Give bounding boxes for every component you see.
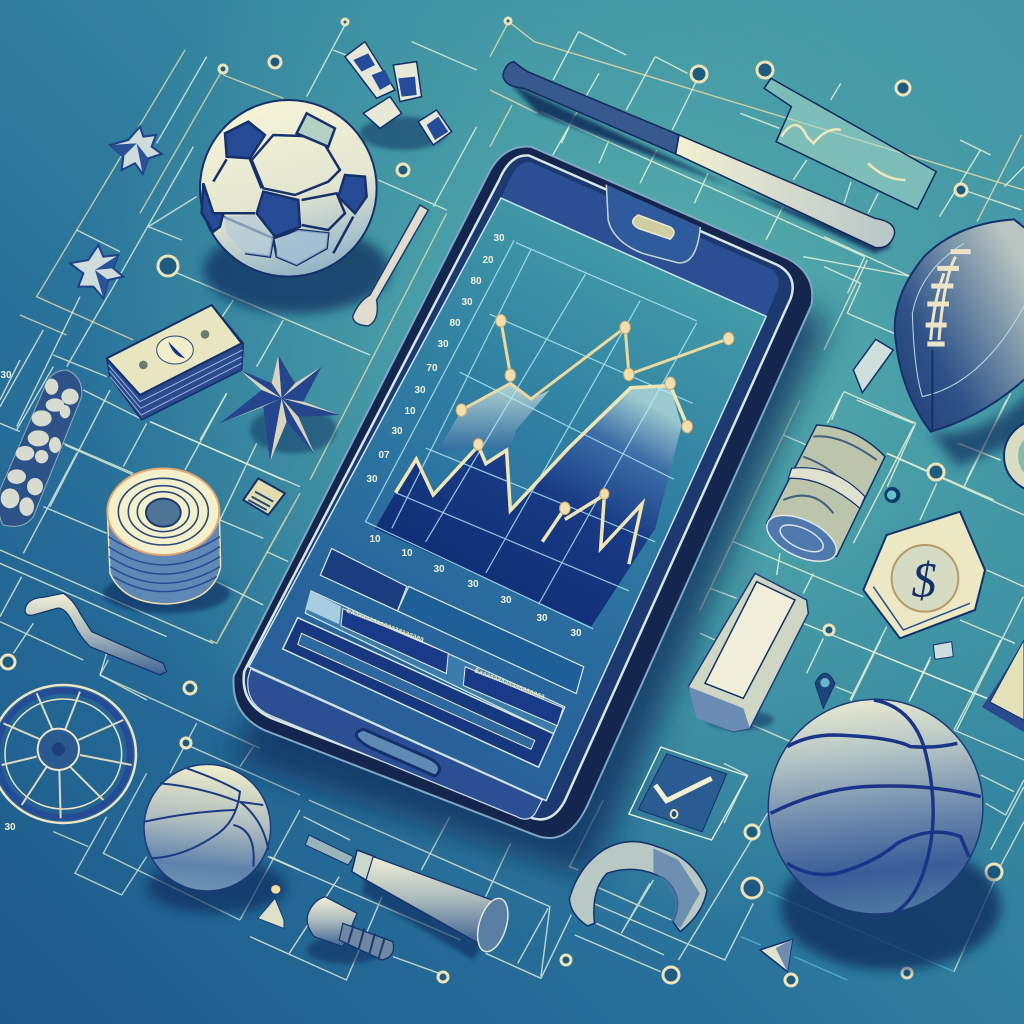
tape roll	[103, 468, 230, 613]
chart points	[456, 315, 734, 515]
stick	[353, 205, 428, 326]
wheel	[0, 685, 136, 823]
chart grid	[365, 240, 697, 629]
small chip	[933, 642, 953, 659]
soccer ball	[200, 100, 390, 313]
screen	[249, 198, 766, 801]
blueprint grid right	[700, 400, 1024, 730]
small teal dot	[884, 487, 900, 503]
row chip	[305, 591, 341, 624]
cash stack	[107, 305, 243, 420]
star small lower	[70, 245, 123, 298]
axis labels: 30	[467, 579, 479, 590]
row field one	[341, 609, 448, 673]
input bar inner	[298, 633, 535, 749]
whistle tube	[305, 835, 513, 960]
roll shadow	[103, 573, 230, 613]
axis labels: 30	[500, 595, 512, 606]
axis labels: 30	[536, 613, 548, 624]
wrench hook	[25, 593, 167, 675]
row field two	[463, 667, 563, 726]
football	[895, 219, 1024, 467]
list row one	[320, 548, 407, 611]
axis labels: 30	[493, 233, 505, 244]
blueprint grid lower left	[53, 660, 300, 920]
foam roller	[688, 573, 808, 732]
axis labels: 30	[391, 426, 403, 437]
diamond chip	[853, 339, 893, 393]
list row two	[397, 586, 584, 694]
bat	[503, 62, 895, 253]
blueprint grid football area	[824, 237, 1011, 500]
row text	[345, 607, 546, 701]
axis labels: 20	[482, 255, 494, 266]
star large	[220, 355, 340, 462]
blueprint grid bottom	[250, 800, 768, 980]
axis labels: 30	[414, 385, 426, 396]
axis labels: 30	[433, 564, 445, 575]
axis labels: 07	[378, 450, 390, 461]
phone body	[233, 147, 812, 838]
bat shadow	[510, 83, 892, 253]
phone shadow	[230, 190, 830, 880]
axis labels: 80	[449, 318, 461, 329]
axis labels	[0, 233, 582, 833]
list row three	[305, 591, 565, 734]
blueprint grid bottom right	[724, 640, 1024, 980]
large basketball	[768, 699, 1001, 970]
axis labels: 10	[404, 406, 416, 417]
earpiece	[633, 215, 674, 239]
earpiece notch	[606, 185, 700, 263]
pin marker	[815, 673, 835, 708]
chart line lower	[396, 386, 687, 564]
row text: Eaaaaaaaaaaaaaaaaaaaa	[345, 607, 425, 643]
star small top	[110, 127, 162, 174]
money roll	[760, 425, 885, 571]
axis labels: 30	[461, 297, 473, 308]
blueprint grid left top	[0, 25, 477, 480]
axis labels: 10	[369, 534, 381, 545]
tactical blocks	[345, 42, 452, 150]
knobbed strip	[0, 370, 82, 526]
chart line upper	[461, 321, 729, 410]
home button	[356, 729, 440, 776]
blueprint grid left middle	[0, 360, 300, 700]
ball shadow	[203, 227, 390, 313]
ball shadow	[781, 843, 1001, 970]
blueprint grid top right	[490, 22, 1024, 293]
cash edge	[982, 640, 1024, 732]
input bar	[283, 618, 554, 767]
row text: Eaaaaaaaaaaaaaaaaaa	[473, 667, 546, 701]
football shadow	[931, 387, 1024, 467]
dollar badge	[863, 512, 985, 638]
glass card	[764, 78, 936, 209]
small triangle marker	[760, 939, 792, 972]
chart area upper	[437, 383, 550, 452]
dial edge	[1004, 420, 1024, 492]
calculator chip	[243, 478, 285, 515]
chart area	[375, 386, 682, 627]
axis labels: 80	[470, 276, 482, 287]
axis labels: 30	[4, 822, 16, 833]
top bezel	[501, 162, 779, 316]
bolt	[307, 897, 394, 963]
axis labels: 30	[0, 370, 12, 381]
axis labels: 30	[570, 628, 582, 639]
small basketball	[144, 764, 287, 913]
phone	[233, 147, 812, 838]
axis labels: 70	[426, 363, 438, 374]
small cone	[258, 885, 284, 928]
dollar badge: $	[911, 552, 936, 608]
arc band	[570, 842, 707, 932]
axis labels: 30	[437, 339, 449, 350]
checkbox	[629, 747, 747, 840]
phone inner rim	[244, 155, 793, 819]
ball shadow	[147, 860, 287, 913]
axis labels: 30	[366, 474, 378, 485]
bottom bezel	[248, 669, 542, 819]
axis labels: 10	[401, 548, 413, 559]
